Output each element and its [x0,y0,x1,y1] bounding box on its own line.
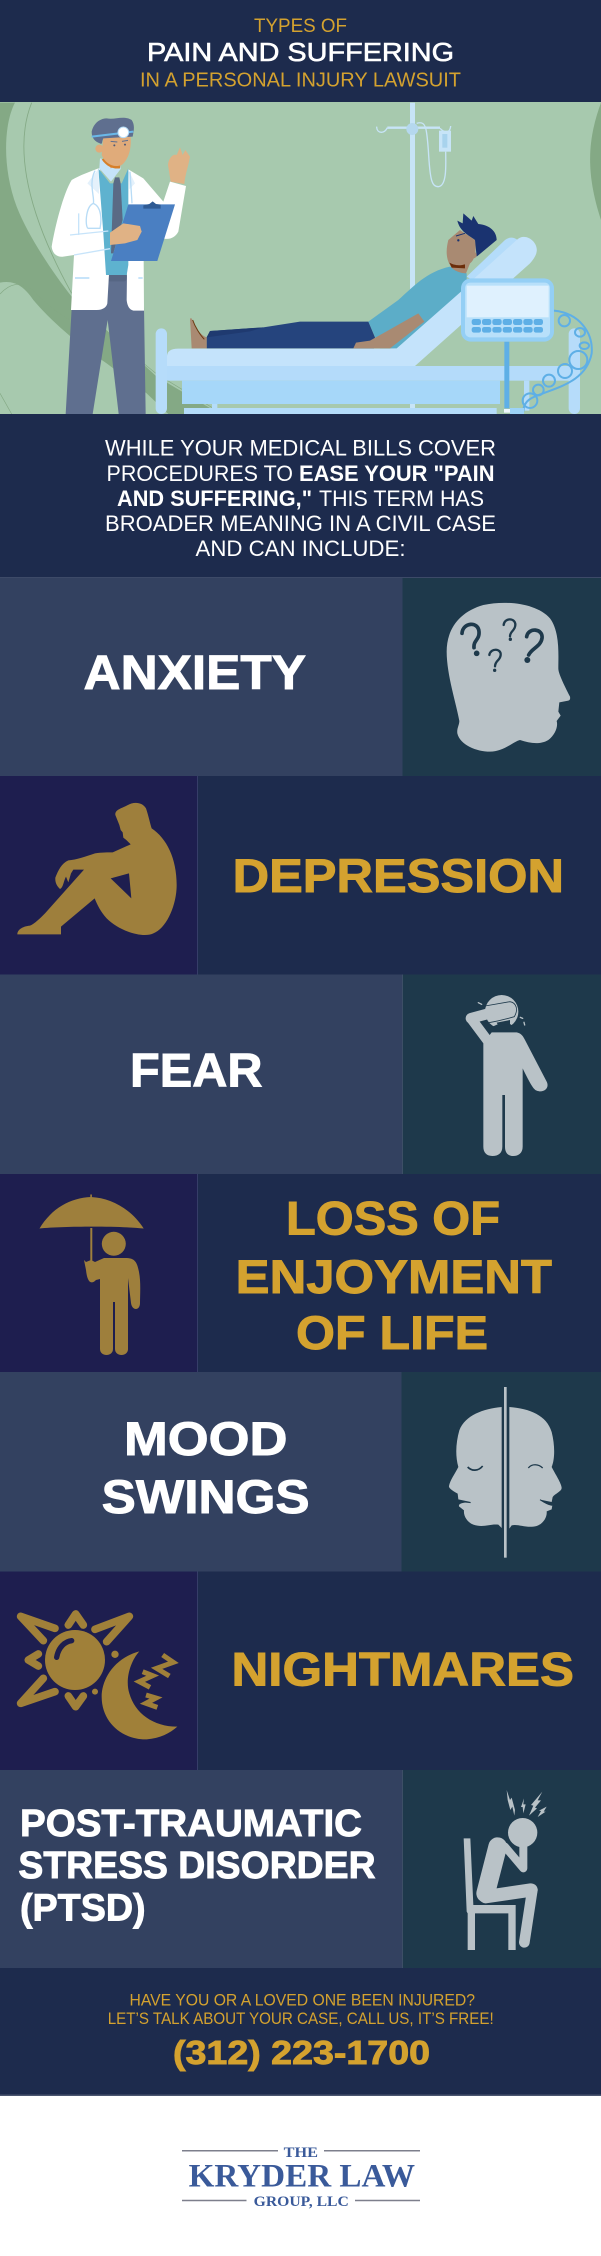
logo word: kryder law: KRYDER LAW [189,2159,415,2195]
hospital bed, IV stand, patient and monitor [156,103,601,414]
icon: man sitting hugging knees [17,803,177,935]
panel: fear [0,974,601,1174]
title line: pain and suffering: PAIN AND SUFFERING [147,37,454,67]
icon: head with question marks [447,603,570,752]
heading: nightmares: NIGHTMARES [232,1643,574,1696]
vital signs monitor [461,278,554,414]
icon: two faces split by a line [449,1387,562,1558]
logo: the kryder law group [182,2145,420,2210]
bed [156,237,580,414]
background shapes and doctor [0,103,213,414]
heading line: swings: SWINGS [102,1470,310,1523]
panel: anxiety [0,577,601,776]
icon: fearful person covering head [471,995,548,1156]
intro line 2 bold: EASE YOUR "PAIN [299,461,494,486]
panel: loss of enjoyment of life [0,1174,601,1372]
title line: types of: TYPES OF [254,15,347,37]
heading line: stress disorder: STRESS DISORDER [18,1845,376,1887]
intro line 5: AND CAN INCLUDE: [196,536,406,561]
patient [190,213,497,348]
icon: sun and moon with zzz [21,1614,177,1739]
logo word: the: THE [284,2145,318,2161]
panel: post-traumatic stress disorder [0,1770,601,1968]
intro line 1: WHILE YOUR MEDICAL BILLS COVER [105,436,496,460]
heading line: loss of: LOSS OF [286,1192,500,1245]
intro line 3 regular: THIS TERM HAS [319,486,484,511]
intro line 3 bold: AND SUFFERING," [117,486,312,511]
heading line: of life: OF LIFE [296,1306,488,1359]
coiled monitor cable [523,311,592,412]
heading line: ptsd: (PTSD) [20,1888,146,1930]
icon: stressed person on chair [464,1790,547,1950]
panel: nightmares [0,1572,601,1770]
title line: in a personal injury lawsuit: IN A PERSONAL INJURY LAWSUIT [140,70,461,92]
doctor [52,118,190,414]
heading: depression: DEPRESSION [233,849,564,902]
header band [0,0,601,102]
IV stand [377,103,451,409]
logo word: group llc: GROUP, LLC [254,2194,349,2210]
panel: mood swings [0,1372,601,1572]
intro panel [0,414,601,577]
panel: depression [0,776,601,974]
heading line: mood: MOOD [124,1412,288,1465]
phone number: (312) 223-1700 [173,2035,430,2072]
heading: fear: FEAR [130,1044,262,1096]
intro line 4: BROADER MEANING IN A CIVIL CASE [105,511,496,536]
icon: person under umbrella [40,1194,144,1355]
call to action line 1: HAVE YOU OR A LOVED ONE BEEN INJURED? [130,1991,475,2010]
heading: anxiety: ANXIETY [84,647,306,700]
heading line: enjoyment: ENJOYMENT [236,1250,552,1303]
intro line 2 regular: PROCEDURES TO [106,461,293,486]
heading line: post-traumatic: POST-TRAUMATIC [20,1803,362,1845]
call to action line 2: LET’S TALK ABOUT YOUR CASE, CALL US, IT’S FREE! [108,2009,494,2028]
illustration: doctor and patient in hospital room [0,102,601,414]
call to action panel [0,1968,601,2096]
